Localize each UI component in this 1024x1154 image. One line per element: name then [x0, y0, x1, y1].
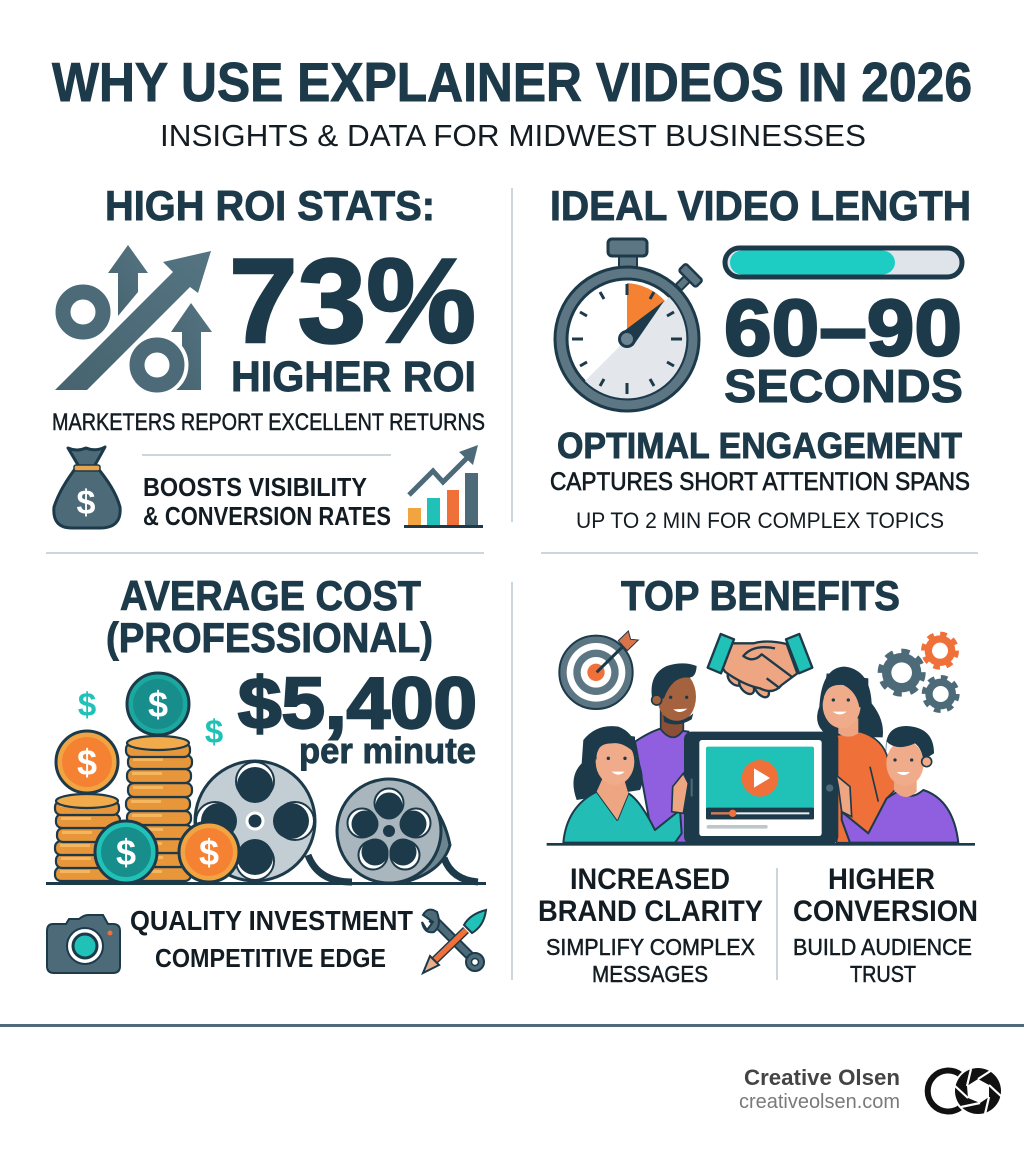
benefit: higher conversion — [793, 863, 978, 987]
stat label: per minute: per minute — [299, 730, 476, 771]
icon: camera — [47, 915, 120, 973]
person: man in purple, right — [836, 726, 958, 843]
panel: high ROI stats — [52, 182, 485, 531]
benefit: higher conversion: HIGHER — [828, 863, 935, 896]
text: optimal engagement: OPTIMAL ENGAGEMENT — [557, 425, 962, 466]
progress bar — [725, 248, 962, 277]
benefit: increased brand clarity — [538, 863, 763, 987]
heading: ideal video length: IDEAL VIDEO LENGTH — [550, 182, 971, 229]
benefit: increased brand clarity: INCREASED — [570, 863, 730, 896]
icon: target with arrow — [559, 631, 638, 709]
icon: coins with dollar signs: $ — [199, 832, 219, 873]
footer brand — [739, 1065, 1003, 1116]
big stat: 60-90: 60–90 — [724, 283, 962, 372]
benefit: higher conversion: CONVERSION — [793, 895, 978, 928]
tablet with video player — [684, 732, 838, 844]
text: captures short attention spans: CAPTURES SHORT ATTENTION SPANS — [550, 468, 970, 496]
icon: film reels — [195, 761, 478, 883]
illustration: coins and film reels — [46, 673, 486, 885]
icon: coin stacks — [55, 736, 192, 881]
icon: wrench and pencil — [422, 910, 486, 973]
heading: high ROI stats: HIGH ROI STATS: — [105, 182, 435, 229]
icon: money bag — [54, 447, 120, 528]
icon: percent with rising arrows — [55, 245, 212, 394]
person: woman in teal — [563, 726, 688, 843]
icon: stopwatch — [555, 239, 703, 411]
icon: coins with dollar signs: $ — [205, 713, 223, 750]
heading: professional: (PROFESSIONAL) — [106, 614, 433, 661]
icon: coins with dollar signs: $ — [77, 742, 97, 783]
logo — [928, 1066, 1003, 1116]
big stat: $5,400: $5,400 — [238, 664, 477, 744]
benefit: increased brand clarity: MESSAGES — [592, 961, 708, 987]
text: competitive edge: COMPETITIVE EDGE — [155, 943, 386, 973]
person: man in purple — [635, 663, 697, 843]
panel: ideal video length — [550, 182, 971, 533]
benefit: higher conversion: BUILD AUDIENCE — [793, 934, 972, 960]
text: up to 2 min: UP TO 2 MIN FOR COMPLEX TOPICS — [576, 508, 944, 533]
icon: handshake — [708, 634, 812, 700]
panel: average cost — [46, 572, 486, 973]
heading: average cost: AVERAGE COST — [120, 572, 421, 619]
subtitle: INSIGHTS & DATA FOR MIDWEST BUSINESSES — [160, 118, 866, 153]
icon: coins with dollar signs: $ — [116, 832, 136, 873]
heading: top benefits: TOP BENEFITS — [621, 572, 900, 619]
panel: top benefits — [538, 572, 978, 987]
caption: marketers report: MARKETERS REPORT EXCELLENT RETURNS — [52, 409, 485, 436]
icon: gears — [880, 634, 957, 711]
text: quality investment: QUALITY INVESTMENT — [130, 905, 413, 936]
icon: coins with dollar signs: $ — [78, 686, 96, 723]
person: woman in orange — [817, 667, 898, 843]
stat label: seconds: SECONDS — [724, 360, 963, 412]
text: boosts visibility: BOOSTS VISIBILITY — [143, 472, 367, 502]
text: conversion rates: & CONVERSION RATES — [143, 501, 391, 531]
icon: rising bar chart — [404, 445, 483, 528]
brand name: Creative Olsen — [744, 1065, 900, 1090]
benefit: increased brand clarity: SIMPLIFY COMPLEX — [546, 934, 755, 960]
icon: coins with dollar signs — [56, 673, 239, 883]
icon: money bag: $ — [77, 484, 96, 522]
illustration: people with tablet and icons — [547, 631, 975, 846]
benefit: higher conversion: TRUST — [850, 961, 916, 987]
icon: coins with dollar signs: $ — [148, 684, 168, 725]
stat label: higher ROI: HIGHER ROI — [231, 353, 476, 401]
brand url: creativeolsen.com — [739, 1091, 900, 1113]
big stat: 73%: 73% — [229, 234, 476, 368]
benefit: increased brand clarity: BRAND CLARITY — [538, 895, 763, 928]
